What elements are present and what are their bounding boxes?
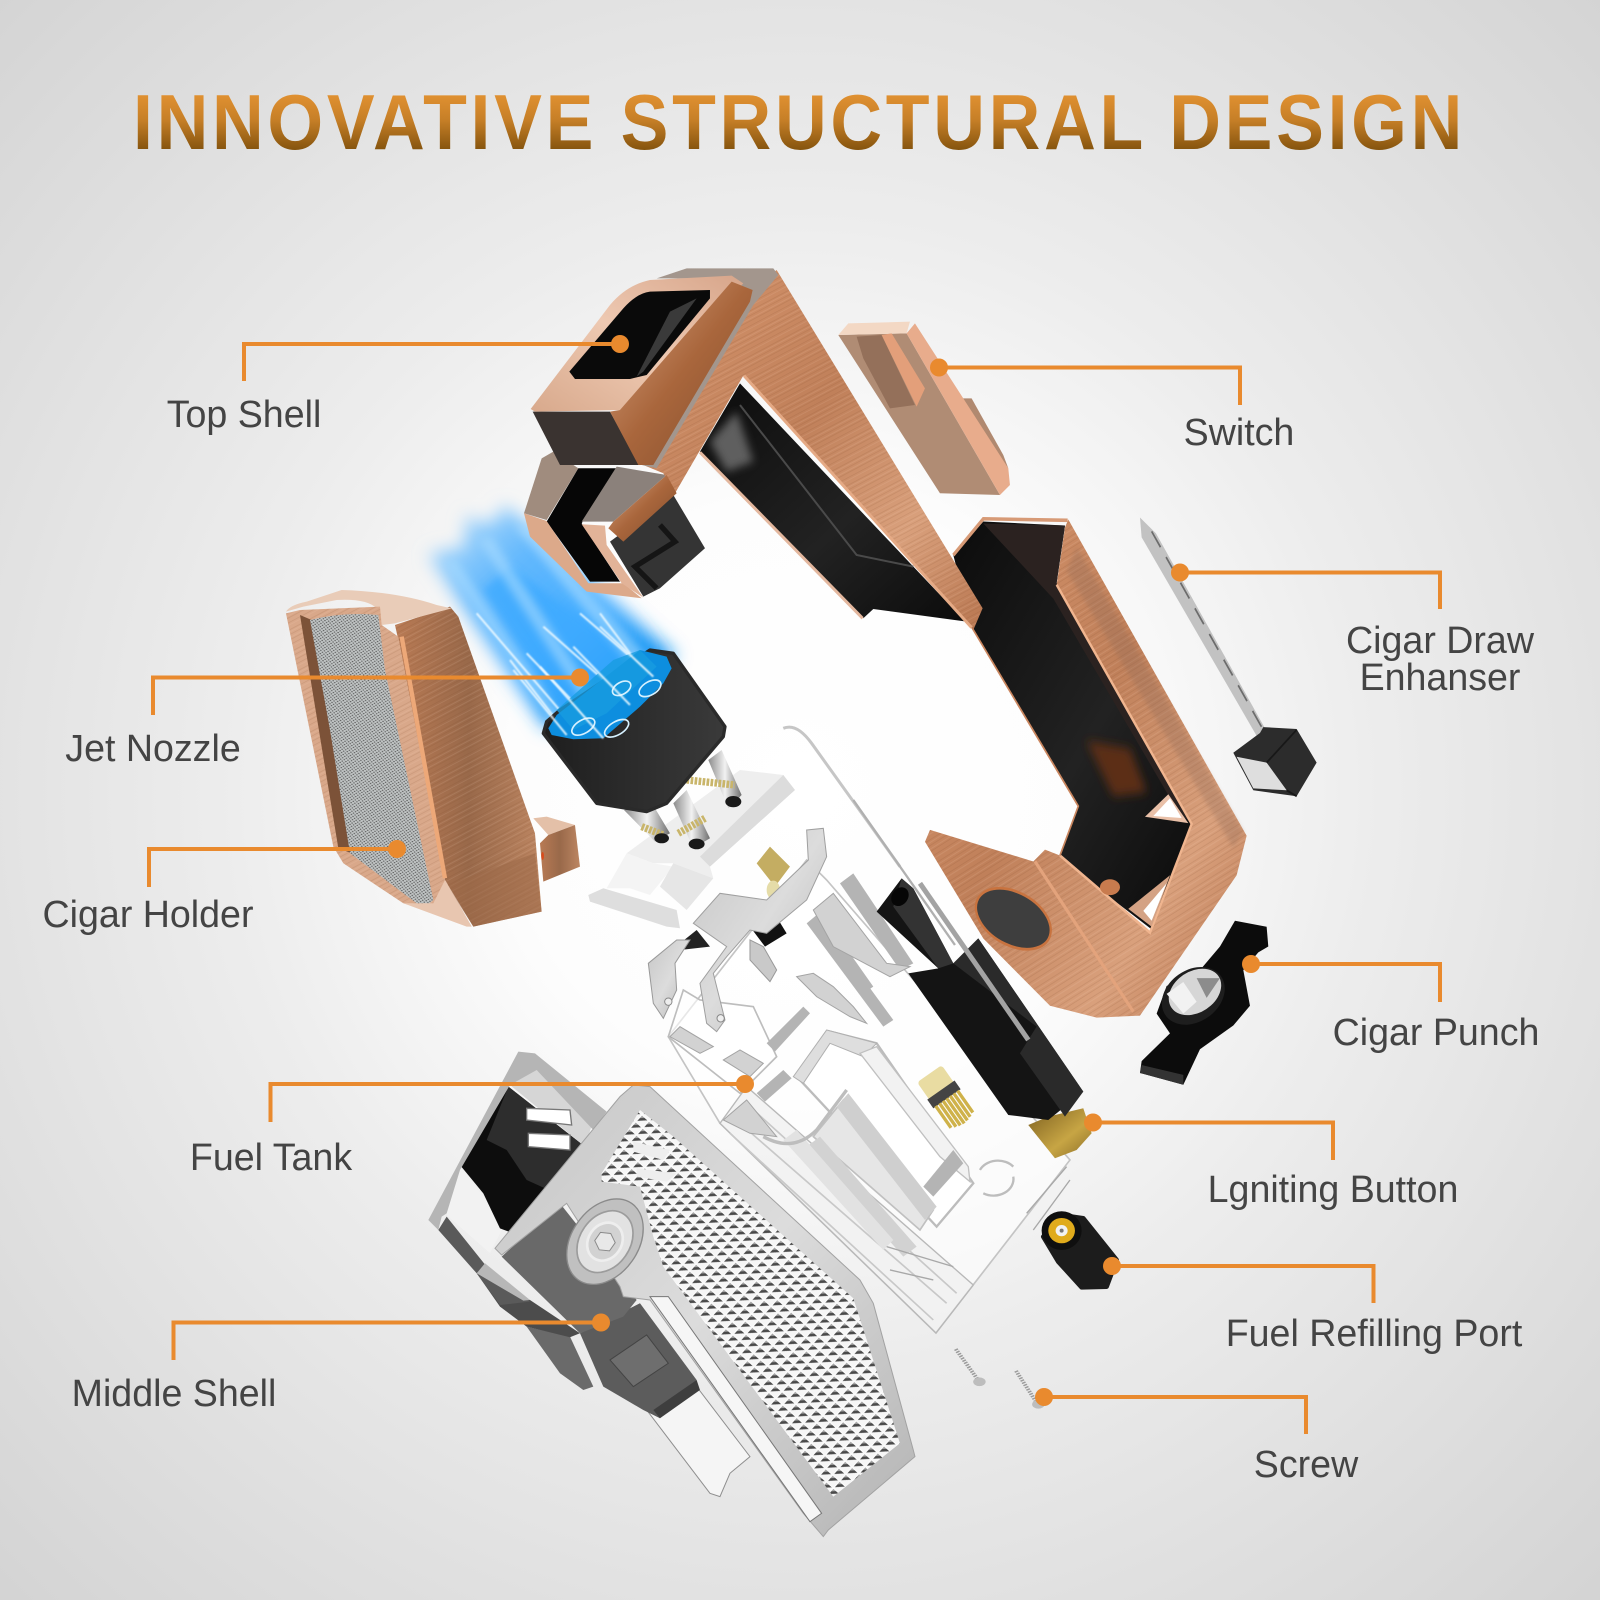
part: fuel refilling port	[1042, 1211, 1117, 1287]
label: Cigar Holder	[43, 840, 406, 935]
part: middle shell	[428, 1052, 915, 1537]
part: silver claws	[648, 828, 827, 1032]
label: Fuel Tank	[190, 1075, 754, 1178]
label: Fuel Refilling Port	[1103, 1257, 1523, 1354]
label: Top Shell	[167, 335, 629, 435]
part: switch	[838, 322, 1010, 495]
label: Switch	[930, 358, 1294, 453]
label: Jet Nozzle	[65, 668, 589, 769]
part: cigar draw enhancer	[1140, 518, 1317, 796]
part: white nozzle bracket	[588, 770, 795, 928]
part: cigar punch	[1140, 921, 1268, 1085]
label: Cigar Punch	[1242, 955, 1539, 1053]
label: Cigar Punch: Cigar Punch	[1333, 1011, 1539, 1053]
label: Jet Nozzle: Jet Nozzle	[65, 727, 241, 769]
part: fuel tank	[668, 847, 1070, 1333]
part: side shell	[925, 519, 1247, 1018]
part: screws	[956, 1349, 1045, 1409]
label: Cigar Draw Enhanser	[1171, 564, 1535, 698]
label: Middle Shell	[72, 1314, 610, 1414]
part: blue jet flame	[428, 505, 677, 737]
label: Cigar Draw Enhanser: Cigar Draw	[1346, 619, 1535, 661]
label: Fuel Tank: Fuel Tank	[190, 1136, 352, 1178]
label: Fuel Refilling Port: Fuel Refilling Port	[1226, 1312, 1523, 1354]
label: Screw: Screw	[1254, 1443, 1359, 1485]
label: Switch: Switch	[1184, 411, 1294, 453]
label: Screw	[1035, 1388, 1359, 1485]
label: Middle Shell: Middle Shell	[72, 1372, 276, 1414]
label: Lgniting Button	[1084, 1114, 1458, 1210]
part: jet nozzle	[513, 627, 900, 867]
label: Cigar Draw Enhanser: Enhanser	[1360, 656, 1520, 698]
part: top shell	[524, 268, 983, 630]
label: Cigar Holder: Cigar Holder	[43, 893, 253, 935]
label: Lgniting Button: Lgniting Button	[1208, 1168, 1458, 1210]
label: Top Shell: Top Shell	[167, 393, 321, 435]
part: black ignition tube and gold igniting button	[853, 800, 1092, 1158]
part: cigar holder	[286, 590, 580, 927]
title: INNOVATIVE STRUCTURAL DESIGN	[133, 78, 1466, 166]
